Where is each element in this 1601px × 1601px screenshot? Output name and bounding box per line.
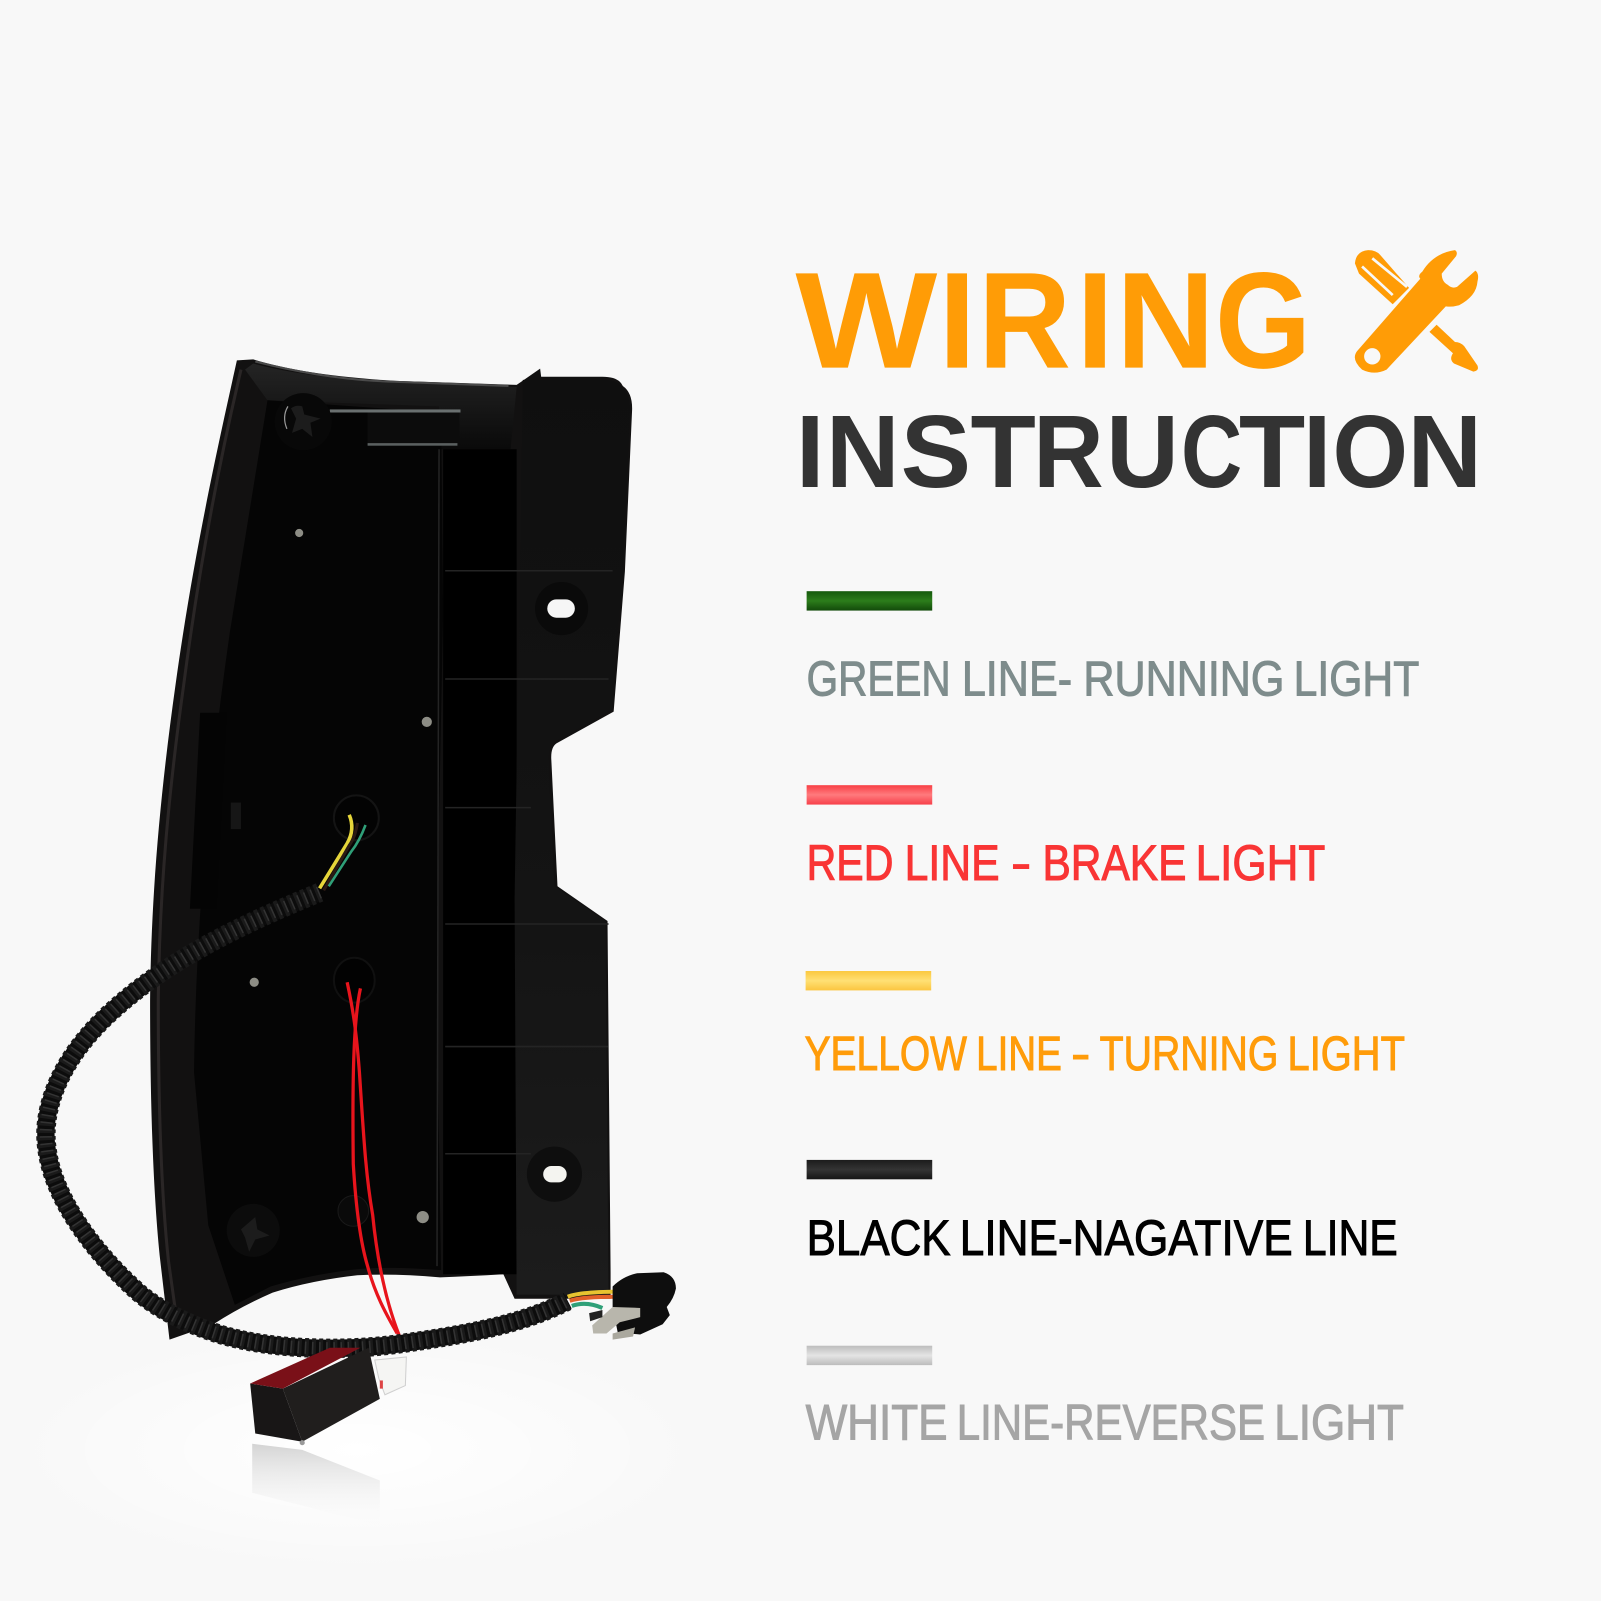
reflection of connector box [252, 1444, 380, 1525]
heading: INSTRUCTION: S [901, 394, 971, 509]
left rim highlight [158, 370, 241, 1312]
screws [250, 529, 432, 1223]
photo: tail light back with wiring [10, 359, 705, 1572]
legend: white line: WHITE [806, 1395, 948, 1451]
lower grommet [334, 958, 375, 1003]
heading: WIRING: G [1215, 244, 1311, 397]
legend: yellow line: LIGHT [1288, 1028, 1405, 1081]
legend: black line [807, 1160, 1398, 1266]
legend: black line: LINE-NAGATIVE [960, 1210, 1293, 1266]
wrench hole [1364, 348, 1380, 365]
screwdriver blade [1429, 325, 1478, 372]
left side window slot [190, 713, 241, 909]
heading: INSTRUCTION: R [1033, 394, 1104, 509]
legend: black line: BLACK [807, 1210, 951, 1266]
legend: yellow line [805, 971, 1405, 1081]
icon: wrench and screwdriver [1355, 250, 1478, 373]
heading: INSTRUCTION: T [1239, 394, 1305, 509]
heading: WIRING: R [978, 244, 1071, 397]
legend: green line: RUNNING [1083, 652, 1284, 706]
heading: WIRING: W [795, 244, 937, 397]
legend: white line: LIGHT [1274, 1395, 1404, 1451]
heading: INSTRUCTION: I [796, 394, 824, 509]
legend: yellow line: YELLOW [805, 1028, 968, 1081]
legend: red line: RED [807, 835, 893, 891]
top glossy edge [245, 363, 517, 449]
legend: green line [807, 591, 1419, 706]
right connector [589, 1272, 676, 1340]
mounting slot detail [330, 409, 460, 446]
heading: INSTRUCTION: N [826, 394, 900, 509]
legend: red line: LINE [905, 835, 1000, 891]
heading: INSTRUCTION: I [1303, 394, 1331, 509]
mounting hole lower [527, 1147, 582, 1202]
heading: WIRING: I [1076, 244, 1114, 397]
legend: black line: LINE [1303, 1210, 1398, 1266]
right flange [515, 380, 630, 1295]
legend: green line: LINE- [962, 652, 1072, 706]
wrench [1355, 250, 1478, 373]
heading: INSTRUCTION: C [1181, 394, 1242, 509]
legend: red line: BRAKE [1042, 835, 1186, 891]
heading: INSTRUCTION: N [1408, 394, 1482, 509]
legend: green line: LIGHT [1294, 652, 1419, 706]
heading: INSTRUCTION: T [971, 394, 1036, 509]
small clip [338, 1196, 369, 1226]
heading: WIRING: N [1116, 244, 1215, 397]
bottom clip [227, 1204, 280, 1257]
legend: yellow line: - [1071, 1028, 1090, 1081]
heading: INSTRUCTION: O [1332, 394, 1408, 509]
channel ribs [437, 449, 613, 1266]
connector wires [568, 1292, 623, 1308]
white connector plug [375, 1357, 406, 1395]
heading: WIRING: I [938, 244, 976, 397]
lamp housing [150, 359, 632, 1340]
legend: white line [806, 1346, 1404, 1451]
legend: red line: LIGHT [1196, 835, 1325, 891]
top clip [275, 393, 332, 450]
legend: yellow line: TURNING [1100, 1028, 1278, 1081]
screwdriver handle [1355, 250, 1409, 304]
black channel [443, 449, 517, 1274]
legend: red line [807, 785, 1325, 891]
heading: INSTRUCTION: U [1106, 394, 1179, 509]
mounting hole upper [535, 582, 588, 635]
inner dark panel [194, 400, 443, 1305]
red wires [347, 982, 399, 1336]
corrugated wire loom [46, 892, 568, 1348]
legend: yellow line: LINE [976, 1028, 1062, 1081]
legend: red line: - [1011, 835, 1031, 891]
legend: white line: LINE-REVERSE [957, 1395, 1265, 1451]
upper grommet and wires [320, 795, 379, 890]
black box with red tape [250, 1348, 380, 1445]
legend: green line: GREEN [807, 652, 951, 706]
